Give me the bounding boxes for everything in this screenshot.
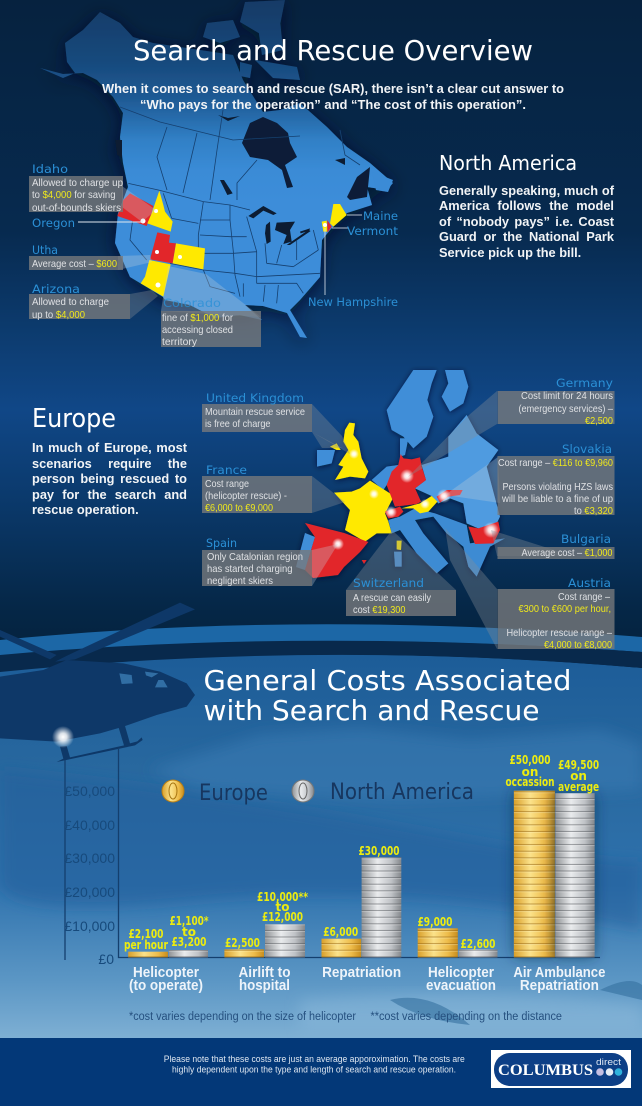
label: New Hampshire — [308, 228, 398, 309]
Hudson Bay — [242, 117, 297, 188]
bars: Air Ambulance Repatriation: £49,500 — [558, 758, 599, 772]
land: Finland — [442, 370, 468, 412]
callout: Germany: €2,500 — [585, 415, 613, 427]
label: Maine — [347, 209, 398, 223]
category labels: Helicopter — [133, 964, 199, 981]
Canadian lakes — [115, 115, 345, 165]
text: Europe: person being rescued to — [32, 471, 187, 486]
callout: Switzerland — [346, 530, 456, 616]
callout: Idaho: Allowed to charge up — [32, 177, 123, 189]
footnotes: *cost varies depending on the size of helicopter — [129, 1011, 356, 1023]
callout: France: €6,000 to €9,000 — [205, 502, 273, 514]
text: Europe — [32, 440, 187, 517]
callout: France: France — [206, 463, 247, 477]
text: North America: Generally speaking, much of — [439, 182, 614, 198]
land: Sardinia — [394, 552, 402, 567]
land: Benelux — [372, 465, 398, 490]
land: mainland North America — [40, 12, 393, 338]
footer note: Please note that these costs are just an average apporoximation. The costs are — [164, 1054, 465, 1064]
callout: Idaho: Idaho — [32, 162, 68, 176]
callout: Germany — [408, 376, 614, 477]
text: North America: of “nobody pays” i.e. Coast — [439, 214, 614, 228]
callout: France — [202, 463, 345, 514]
land: Ireland — [317, 450, 335, 467]
sky and mountain backdrop — [0, 624, 642, 1040]
Gulf of St Lawrence — [347, 167, 370, 200]
cockpit windows — [119, 672, 168, 687]
country: Switzerland — [385, 507, 403, 518]
land: Newfoundland — [372, 172, 393, 192]
callout: Idaho — [29, 162, 156, 222]
heading: General Costs: with Search and Rescue — [204, 694, 540, 727]
state: Oregon — [117, 193, 153, 226]
title: Search and Rescue Overview — [133, 34, 533, 67]
bars: Air Ambulance Repatriation — [506, 753, 599, 957]
state borders — [128, 183, 320, 303]
callout: Germany: (emergency services) – — [518, 403, 613, 415]
callout: Slovakia: Persons violating HZS laws — [502, 481, 613, 493]
bars: Helicopter to operate: £1,100* — [170, 914, 209, 928]
callout: France: (helicopter rescue) - — [205, 490, 287, 502]
y axis labels — [64, 783, 115, 967]
bars: Helicopter evacuation: £9,000 — [418, 915, 452, 929]
callout: Oregon — [32, 216, 143, 230]
page background — [0, 0, 642, 660]
category labels: Repatriation — [322, 964, 401, 981]
callout: Arizona: Allowed to charge — [32, 296, 109, 308]
bars: Helicopter to operate: £3,200 — [172, 935, 206, 949]
country: Spain — [305, 523, 368, 578]
callout: Germany: Cost limit for 24 hours — [521, 390, 613, 402]
landing skid — [57, 726, 143, 762]
y axis labels: £50,000 — [64, 783, 115, 799]
callout: United Kingdom: United Kingdom — [206, 391, 304, 405]
intro text — [102, 81, 564, 112]
callout: United Kingdom: Mountain rescue service — [205, 406, 305, 418]
callout: Idaho: to $4,000 for saving — [32, 189, 116, 201]
callout: Switzerland: Switzerland — [353, 576, 424, 590]
callout: Colorado: Colorado — [163, 296, 221, 310]
rotor blades — [0, 603, 195, 662]
callout: Austria: Austria — [568, 576, 611, 590]
callout: Colorado: fine of $1,000 for — [162, 312, 233, 324]
category labels: Airlift to — [238, 964, 290, 981]
text: North America — [439, 182, 614, 260]
callout: Slovakia: Cost range – €116 to €9,960 — [498, 457, 613, 469]
country: United Kingdom — [330, 423, 368, 480]
callout: Colorado: accessing closed — [162, 324, 233, 336]
heading: North America: North America — [439, 151, 577, 175]
footer band — [0, 1038, 642, 1106]
bars: Helicopter to operate: £2,100 — [128, 927, 164, 941]
callout: Switzerland: cost €19,300 — [353, 604, 406, 616]
bars: Repatriation: £30,000 — [358, 844, 400, 858]
North America map — [40, 0, 393, 338]
category labels: Repatriation — [520, 977, 599, 994]
legend — [162, 780, 474, 806]
category labels: Helicopter — [428, 964, 494, 981]
label: New Hampshire: New Hampshire — [308, 295, 398, 309]
state: Utah — [150, 232, 176, 263]
state: Colorado — [173, 243, 205, 269]
callout: Oregon: Oregon — [32, 216, 75, 230]
callout: Austria: Helicopter rescue range – — [506, 627, 612, 639]
bars: Helicopter evacuation: £2,600 — [460, 937, 496, 951]
footnotes — [129, 1011, 562, 1023]
callout: Slovakia: to €3,320 — [574, 505, 613, 517]
callout: Bulgaria: Average cost – €1,000 — [522, 547, 613, 559]
y axis labels: £10,000 — [64, 918, 115, 934]
text: Europe: rescue operation. — [32, 502, 139, 517]
category labels — [129, 964, 605, 994]
text: Europe: scenarios require the — [32, 456, 187, 470]
legend: North America — [330, 780, 474, 805]
text: North America: Guard or the National Park — [439, 229, 614, 244]
y axis labels: £0 — [98, 951, 114, 967]
searchlight glow — [52, 726, 74, 748]
state: Vermont — [322, 221, 327, 232]
category labels: Air Ambulance — [513, 964, 605, 981]
callout: Spain — [202, 536, 338, 587]
land: Portugal — [296, 533, 315, 570]
y axis labels: £40,000 — [64, 817, 115, 833]
logo: Columbus Direct: direct — [596, 1057, 621, 1068]
state: New Hampshire — [327, 220, 332, 233]
y axis labels: £30,000 — [64, 850, 115, 866]
land: Norway and Sweden — [387, 370, 437, 448]
text: North America: Service pick up the bill. — [439, 244, 581, 260]
US states — [117, 180, 347, 303]
footer note: highly dependent upon the type and length of search and rescue operation. — [172, 1064, 456, 1074]
callout: Utha: Utha — [32, 243, 58, 257]
callout: Austria — [445, 528, 614, 651]
footnotes: **cost varies depending on the distance — [370, 1011, 562, 1023]
state: Arizona — [141, 260, 171, 297]
text: Europe: In much of Europe, most — [32, 440, 187, 455]
axis lines — [65, 748, 600, 960]
callout: Arizona: up to $4,000 — [32, 309, 85, 321]
callout: Spain: Spain — [206, 536, 237, 550]
bars: Air Ambulance Repatriation: average — [558, 780, 599, 794]
heading: General Costs: General Costs Associated — [204, 664, 572, 697]
callout: Austria: Cost range – — [558, 591, 610, 603]
callout: Austria: €300 to €600 per hour, — [518, 603, 611, 615]
bars: Helicopter to operate: per hour — [124, 938, 168, 952]
bars: Air Ambulance Repatriation: £50,000 — [510, 753, 550, 767]
Canadian borders — [120, 107, 360, 200]
callout: Arizona: Arizona — [32, 282, 80, 296]
callout: Utha — [29, 243, 152, 270]
callout: Spain: Only Catalonian region — [207, 551, 303, 563]
category labels: hospital — [239, 977, 290, 994]
callout: Utha: Average cost – $600 — [32, 258, 117, 270]
callout: United Kingdom — [202, 391, 350, 454]
callout: Bulgaria — [491, 530, 614, 559]
heading: General Costs — [204, 664, 572, 727]
callout: Austria: €4,000 to €8,000 — [544, 639, 612, 651]
bars: Airlift to hospital: £12,000 — [262, 910, 303, 924]
intro text: “Who pays for the operation” and “The cost of this operation”. — [140, 97, 526, 112]
heading: Europe: Europe — [32, 404, 116, 434]
callout: Arizona — [29, 282, 158, 321]
land: eastern Europe — [415, 415, 500, 528]
label: Vermont: Vermont — [347, 224, 399, 238]
bars: Air Ambulance Repatriation: occassion — [506, 775, 554, 789]
text: Europe: pay for the search and — [32, 486, 187, 502]
land: Denmark — [400, 438, 408, 457]
country: France — [334, 481, 402, 550]
logo: Columbus Direct: COLUMBUS — [498, 1062, 593, 1079]
state: Maine — [330, 204, 347, 227]
callout: Bulgaria: Bulgaria — [561, 532, 611, 546]
bars: Helicopter to operate: to — [182, 925, 196, 939]
label: Maine: Maine — [363, 209, 398, 223]
helicopter silhouette — [0, 603, 195, 762]
intro text: When it comes to search and rescue (SAR), there isn’t a clear cut answer to — [102, 81, 564, 96]
category labels: (to operate) — [129, 977, 203, 994]
footer note — [164, 1054, 465, 1074]
bar chart — [64, 748, 605, 994]
bars: Airlift to hospital: to — [276, 900, 289, 914]
text: North America: America follows the model — [439, 198, 614, 213]
callout: Spain: has started charging — [207, 563, 293, 575]
state: Idaho — [147, 191, 173, 232]
fuselage — [0, 660, 195, 742]
callout: Spain: negligent skiers — [207, 575, 273, 587]
bars: Airlift to hospital — [224, 890, 309, 957]
country: Germany — [387, 454, 426, 507]
category labels: evacuation — [426, 977, 496, 994]
callout: Germany: Germany — [556, 376, 613, 390]
land: Arctic islands — [203, 0, 300, 80]
bars: Air Ambulance Repatriation: on — [522, 765, 538, 779]
bars: Helicopter to operate — [124, 914, 209, 957]
bars: Repatriation — [322, 844, 401, 957]
callout: Switzerland: A rescue can easily — [353, 592, 432, 604]
callout: France: Cost range — [205, 478, 249, 490]
land: Balkans and Italy — [388, 508, 505, 577]
Europe map — [296, 370, 505, 578]
country: Balearic islands — [362, 560, 367, 564]
callout: Slovakia: Slovakia — [562, 442, 612, 456]
y axis labels: £20,000 — [64, 884, 115, 900]
legend: Europe — [199, 781, 268, 806]
bars: Air Ambulance Repatriation: on — [570, 769, 587, 783]
glow points on the maps — [140, 209, 499, 550]
bars: Airlift to hospital: £10,000** — [257, 890, 309, 904]
country: Bulgaria — [468, 522, 500, 544]
Great Lakes — [220, 180, 311, 245]
logo: Columbus Direct — [491, 1050, 631, 1088]
callout: Idaho: out-of-bounds skiers — [32, 202, 121, 214]
callout: Colorado: territory — [162, 336, 198, 348]
country: Slovakia — [437, 490, 463, 503]
callout: Slovakia — [445, 442, 614, 517]
country: Austria — [402, 496, 437, 513]
callout: United Kingdom: is free of charge — [205, 418, 271, 430]
bars: Repatriation: £6,000 — [323, 925, 358, 939]
callout: Slovakia: will be liable to a fine of up — [501, 493, 613, 505]
bars: Helicopter evacuation — [418, 915, 498, 957]
bars: Airlift to hospital: £2,500 — [225, 936, 260, 950]
callout: Colorado — [161, 266, 261, 348]
